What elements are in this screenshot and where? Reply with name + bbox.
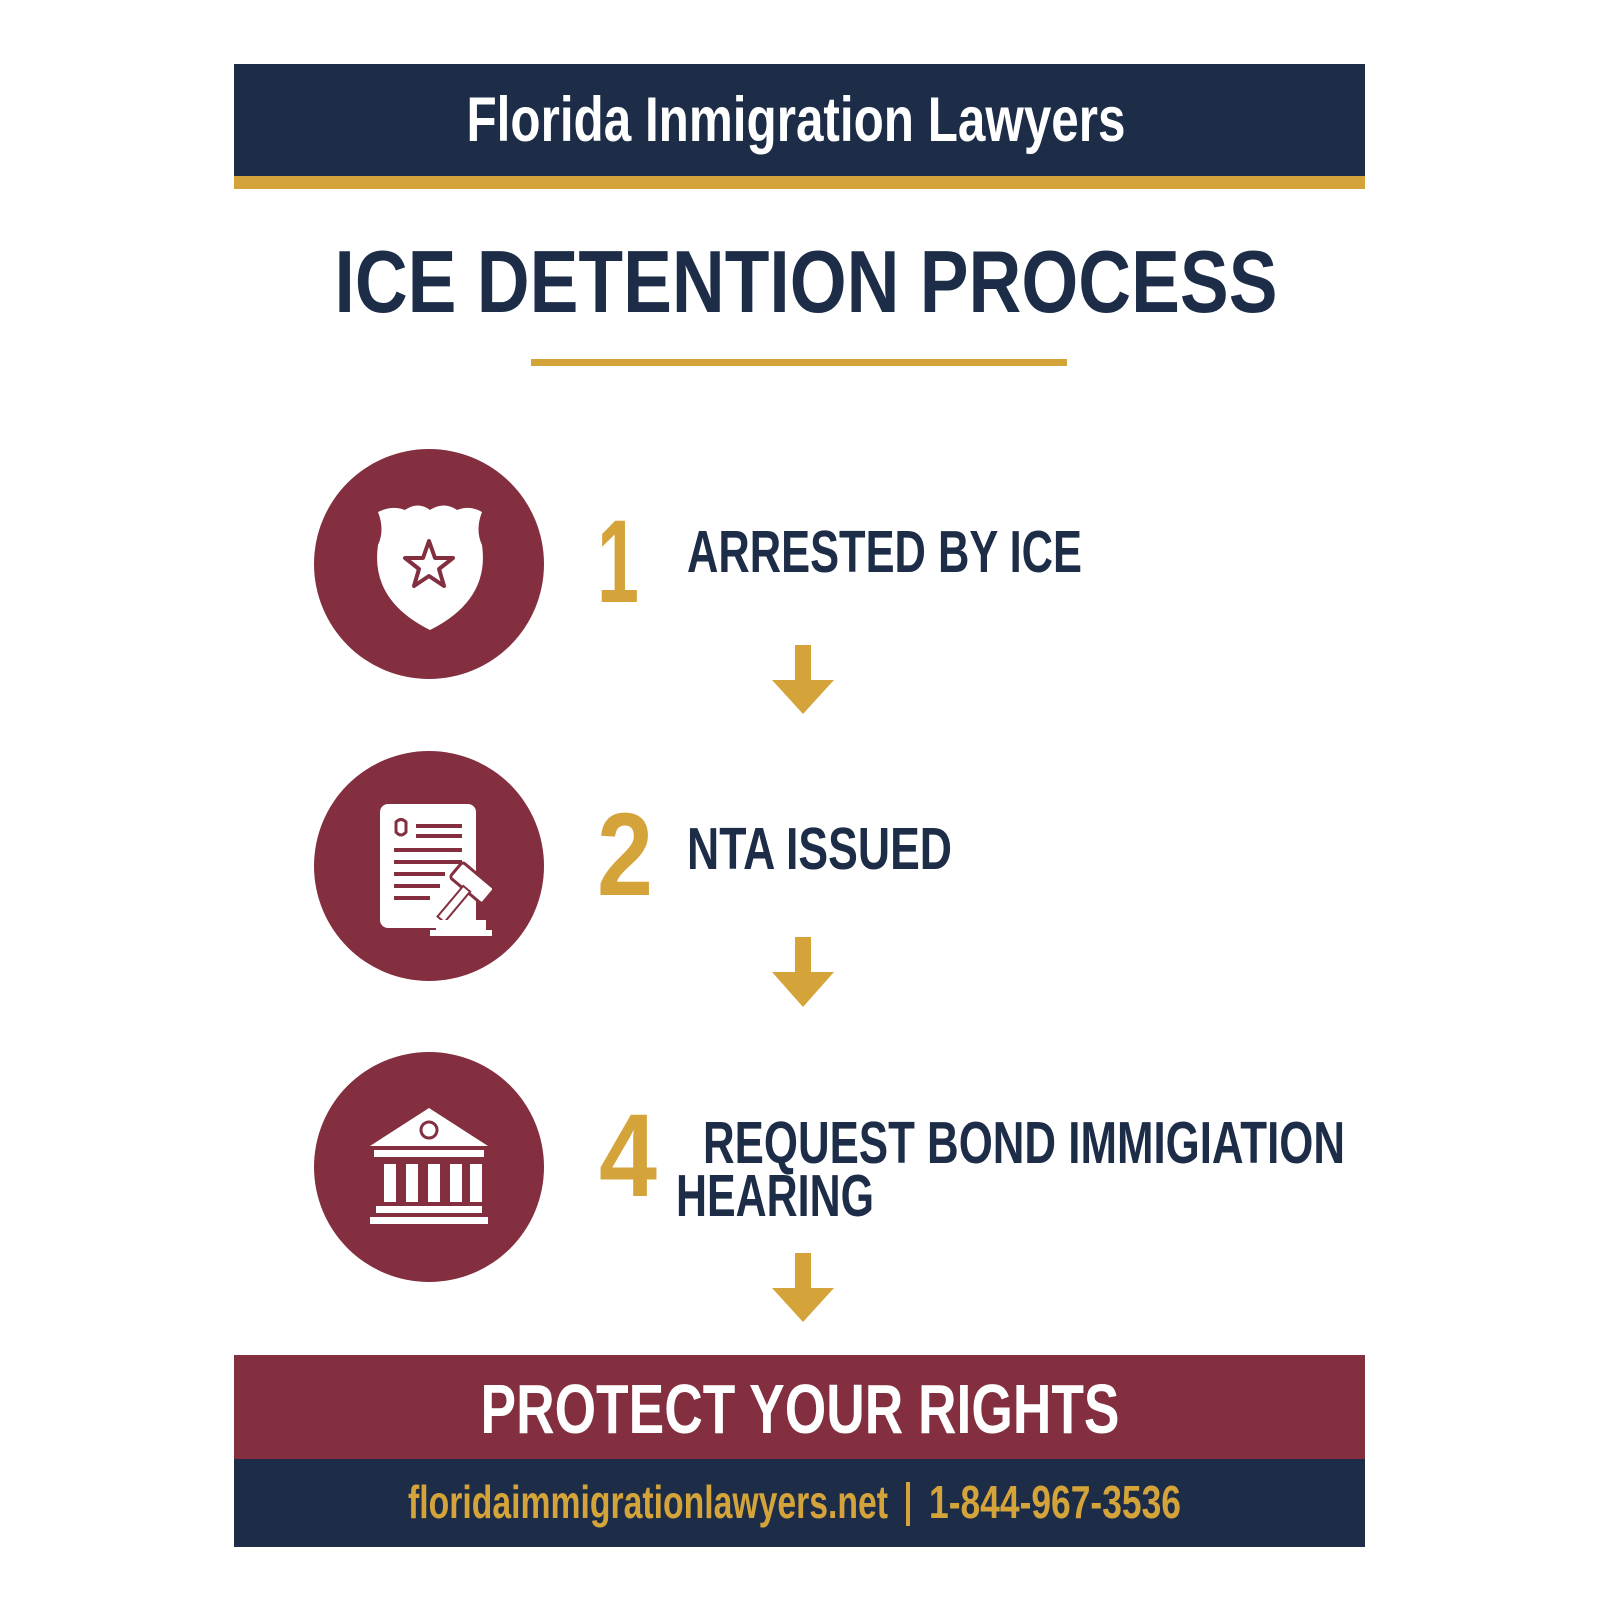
arrow 1 [772, 645, 834, 714]
arrow 3 [772, 1253, 834, 1322]
icon: badge [314, 449, 544, 679]
step text: ARRESTED BY ICE [687, 519, 1082, 585]
icon: courthouse [314, 1052, 544, 1282]
footer: protect your rights: PROTECT YOUR RIGHTS [480, 1370, 1120, 1448]
footer: protect your rights [234, 1355, 1365, 1459]
step 4 [314, 1052, 1345, 1282]
footer: contact [234, 1459, 1365, 1547]
arrow 2 [772, 937, 834, 1007]
step 1 [314, 449, 1082, 679]
step 2 [314, 751, 952, 981]
number 1: 1 [597, 496, 639, 628]
step text: HEARING [676, 1163, 874, 1229]
step text: REQUEST BOND IMMIGIATION [703, 1110, 1345, 1176]
step text: NTA ISSUED [687, 816, 952, 882]
header bar: Florida Inmigration Lawyers [466, 85, 1126, 155]
title: ICE DETENTION PROCESS [334, 232, 1278, 331]
number 2: 2 [597, 789, 653, 921]
header bar [234, 64, 1365, 189]
footer: contact: 1-844-967-3536 [929, 1476, 1181, 1528]
number 4: 4 [599, 1090, 657, 1222]
footer: contact: floridaimmigrationlawyers.net [408, 1476, 888, 1528]
icon: document with gavel [314, 751, 544, 981]
title underline [531, 359, 1067, 366]
